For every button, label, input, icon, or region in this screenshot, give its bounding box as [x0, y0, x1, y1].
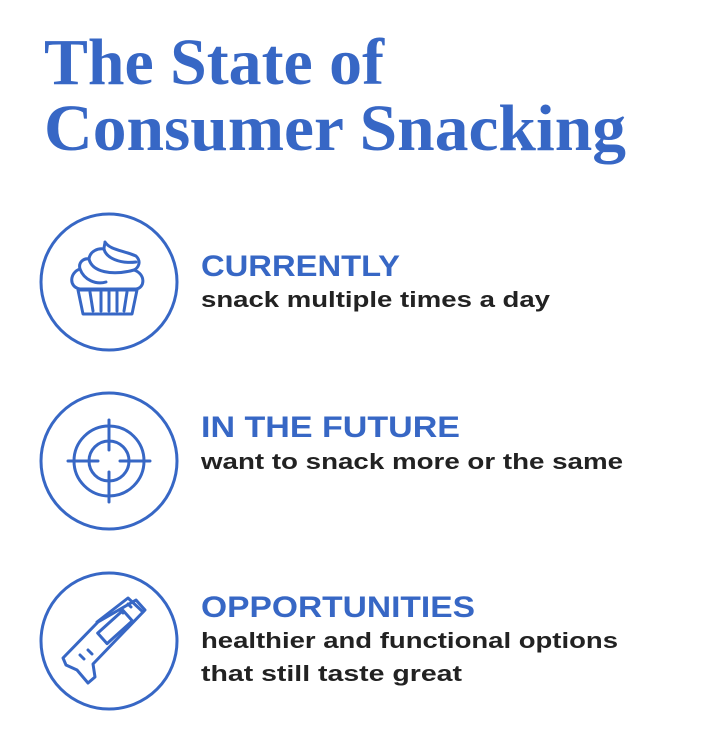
icon: target circle: [41, 393, 177, 529]
title: The State of: [44, 26, 385, 99]
text block: opportunities: healthier and functional options: [201, 628, 618, 653]
title: Consumer Snacking: [44, 92, 626, 165]
text block: opportunities: OPPORTUNITIES: [201, 591, 475, 624]
text block: currently: snack multiple times a day: [201, 287, 551, 312]
icon: cupcake circle: [41, 214, 177, 350]
text block: future: want to snack more or the same: [200, 449, 623, 474]
text block: future: IN THE FUTURE: [201, 411, 460, 444]
text block: opportunities: that still taste great: [201, 661, 463, 686]
text block: opportunities: [201, 591, 618, 686]
icon: snack bar circle: [41, 573, 177, 709]
title: [44, 26, 626, 165]
text block: future: [200, 411, 623, 474]
text block: currently: CURRENTLY: [201, 250, 400, 283]
text block: currently: [201, 250, 551, 312]
